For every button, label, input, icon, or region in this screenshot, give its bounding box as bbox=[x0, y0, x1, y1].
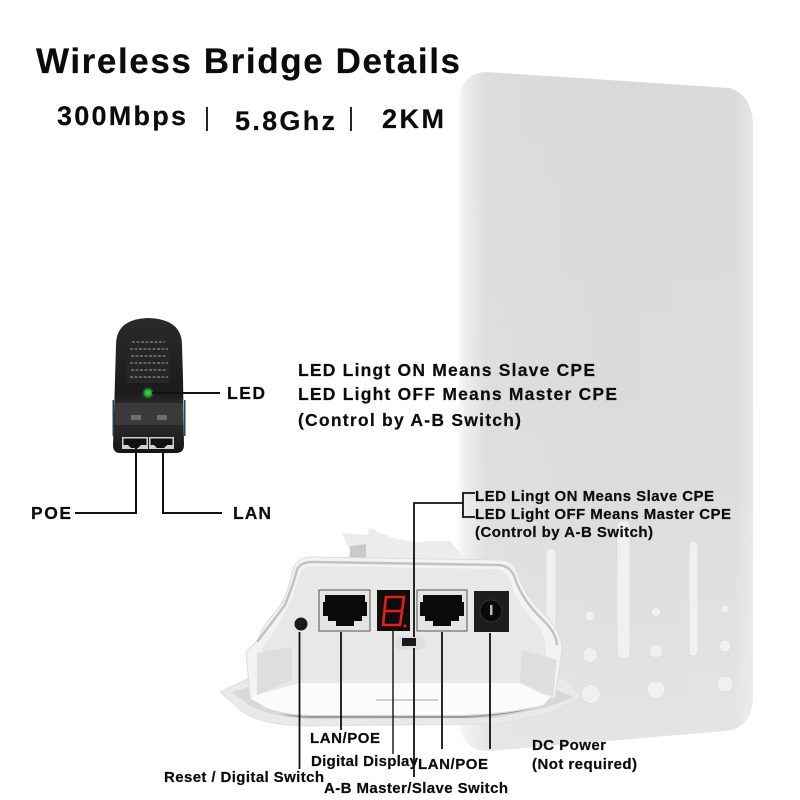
title: Wireless Bridge Details bbox=[36, 42, 460, 81]
shell groove bbox=[257, 562, 557, 645]
adapter band bbox=[115, 403, 183, 425]
LED explanation text block bbox=[298, 360, 617, 430]
inner face bbox=[258, 566, 546, 695]
separator one bbox=[206, 107, 208, 131]
port: right LAN bbox=[417, 590, 467, 631]
mounting bracket bbox=[340, 527, 462, 570]
housing shell bbox=[246, 557, 562, 698]
side clips bbox=[257, 647, 557, 697]
lower tray bbox=[250, 683, 550, 715]
adapter label bbox=[127, 338, 170, 383]
tray shadow bbox=[280, 708, 535, 718]
LED explanation text block: LED Light OFF Means Master CPE bbox=[298, 384, 617, 404]
spec: range: 2KM bbox=[382, 104, 444, 134]
line: DC power bbox=[489, 633, 491, 749]
label: left LAN/POE: LAN/POE bbox=[310, 730, 380, 747]
label: DC power bbox=[532, 737, 637, 773]
spec row bbox=[57, 101, 444, 136]
arrow: POE bbox=[75, 448, 136, 513]
device LED note: (Control by A-B Switch) bbox=[475, 524, 653, 541]
label: digital display: Digital Display bbox=[311, 753, 419, 770]
POE adapter callouts bbox=[31, 383, 271, 523]
panel: antenna body bbox=[457, 72, 753, 751]
label: A-B switch: A-B Master/Slave Switch bbox=[324, 780, 508, 797]
reset button bbox=[294, 618, 308, 630]
device LED note: LED Light OFF Means Master CPE bbox=[475, 506, 731, 523]
adapter side trim bbox=[112, 400, 186, 436]
line: switch bbox=[413, 648, 415, 777]
antenna dots bbox=[582, 605, 733, 704]
label: reset: Reset / Digital Switch bbox=[164, 769, 324, 786]
LED explanation text block: LED Lingt ON Means Slave CPE bbox=[298, 360, 595, 380]
separator two bbox=[350, 107, 352, 131]
spec: speed: 300Mbps bbox=[57, 101, 186, 131]
LED explanation text block: (Control by A-B Switch) bbox=[298, 410, 521, 430]
line: right LAN bbox=[441, 632, 443, 749]
arrow: LED bbox=[152, 392, 220, 394]
label: right LAN/POE: LAN/POE bbox=[418, 756, 488, 773]
arrow: LAN bbox=[163, 450, 222, 513]
label: LAN: LAN bbox=[233, 503, 271, 523]
device LED note bbox=[475, 488, 731, 541]
A-B switch bbox=[395, 636, 425, 650]
tray slot bbox=[376, 699, 438, 701]
DC power jack bbox=[474, 591, 509, 632]
label: POE: POE bbox=[31, 503, 71, 523]
line: left LAN bbox=[340, 632, 342, 730]
line: reset bbox=[298, 632, 300, 769]
base lip bbox=[220, 679, 582, 726]
POE adapter bbox=[112, 318, 186, 453]
line: digital display bbox=[392, 631, 394, 754]
device LED note: LED Lingt ON Means Slave CPE bbox=[475, 488, 714, 505]
line: LED bracket bbox=[414, 493, 475, 637]
adapter ports bbox=[122, 437, 174, 449]
antenna ribs bbox=[546, 520, 698, 659]
digital display bbox=[377, 590, 410, 631]
bracket shadow bbox=[350, 544, 366, 562]
LED indicator bbox=[141, 386, 155, 400]
label: DC power: DC Power bbox=[532, 737, 606, 754]
device: port housing bbox=[220, 527, 582, 726]
port: left LAN bbox=[319, 590, 370, 631]
label: LED: LED bbox=[227, 383, 265, 403]
adapter port marks bbox=[131, 415, 167, 420]
lip inner band bbox=[232, 686, 574, 719]
label: DC power: (Not required) bbox=[532, 756, 637, 773]
device callout lines bbox=[300, 493, 490, 777]
device port labels bbox=[164, 730, 637, 797]
spec: frequency: 5.8Ghz bbox=[235, 106, 335, 136]
